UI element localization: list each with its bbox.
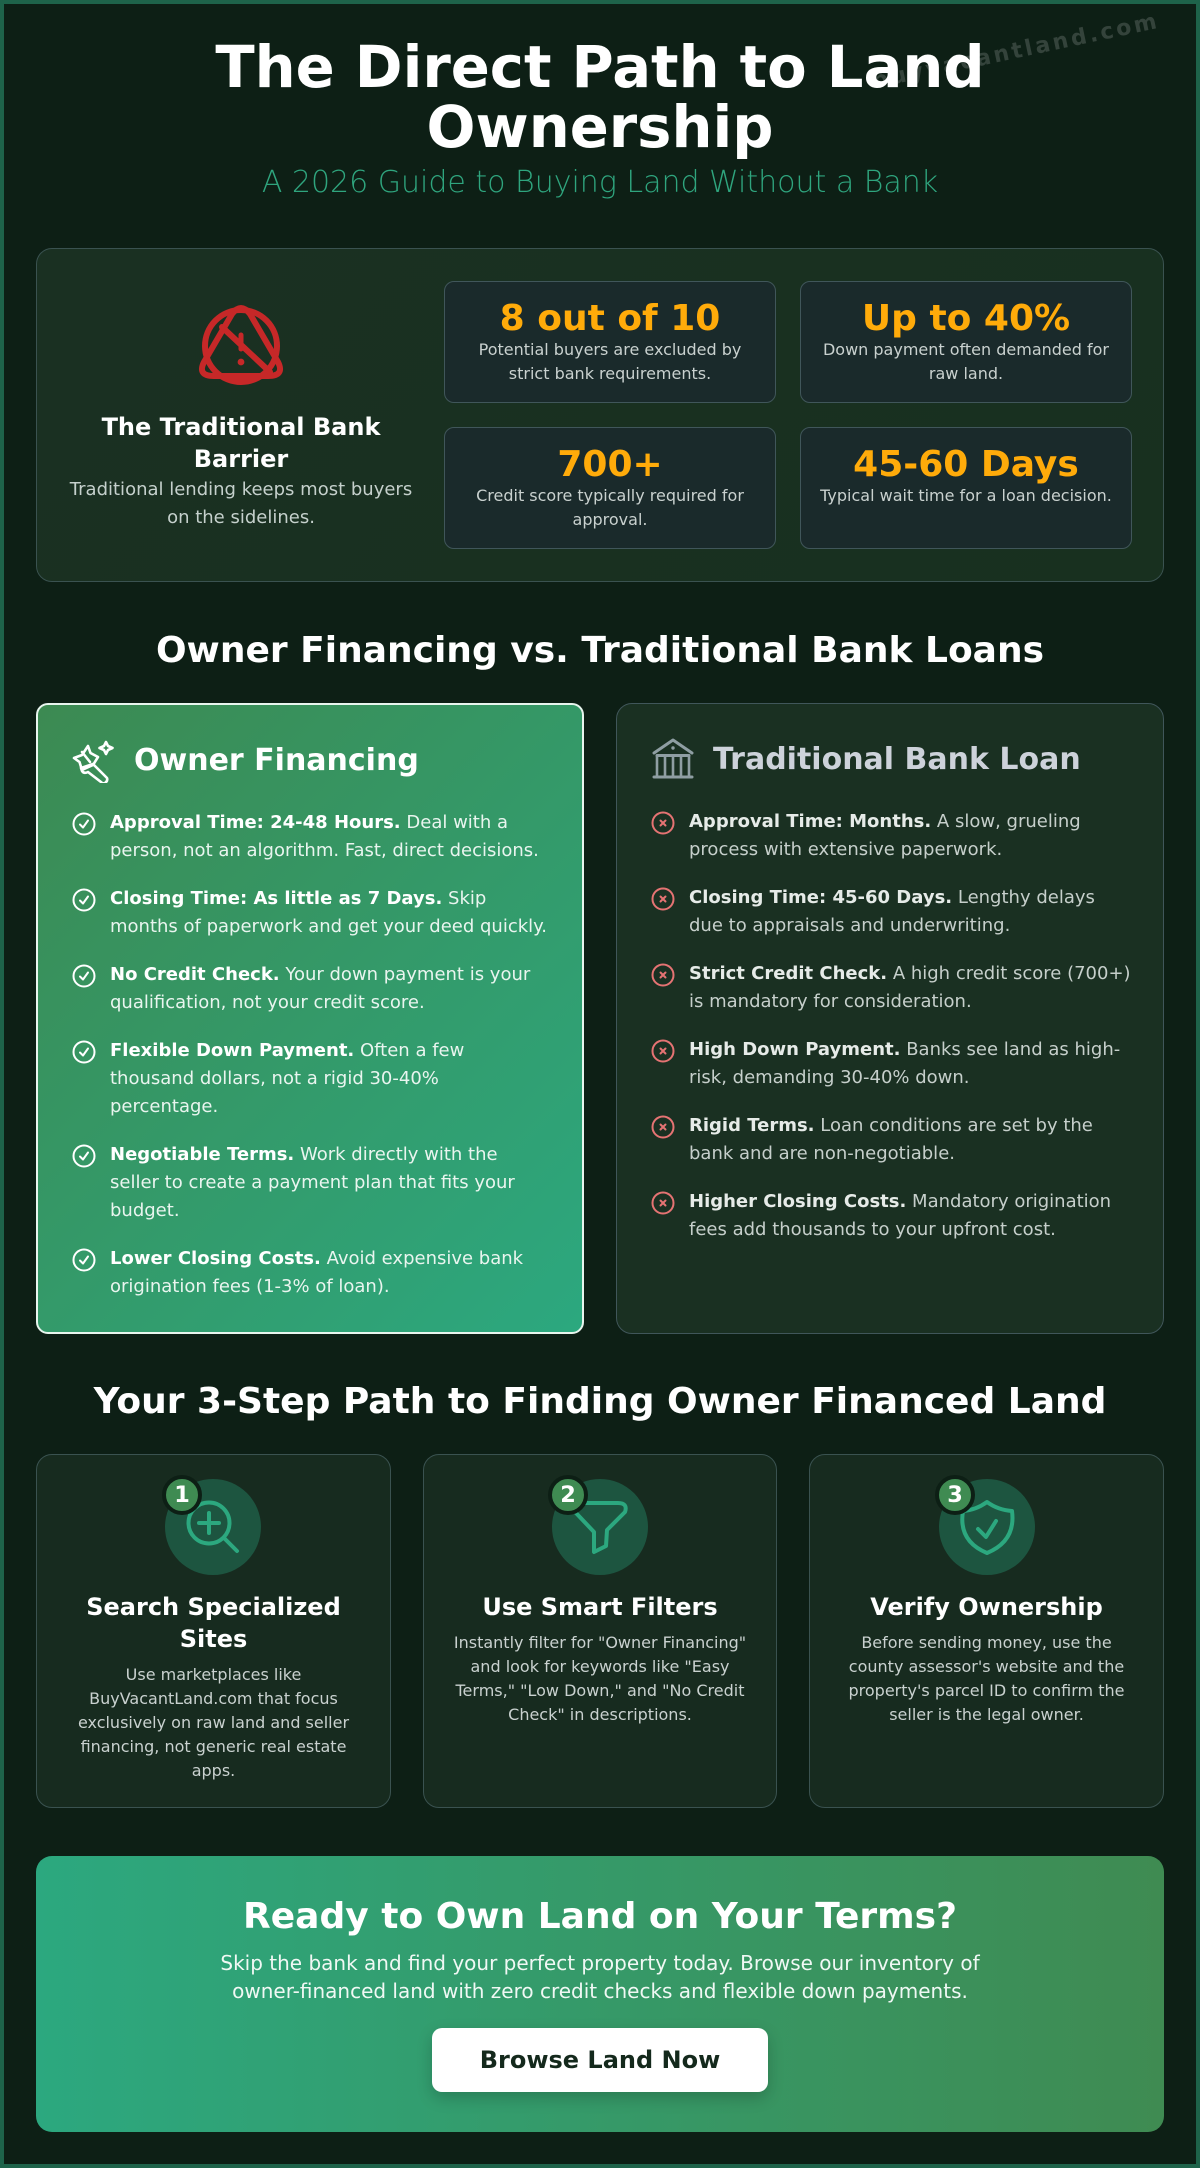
barrier heading: Barrier — [194, 445, 288, 473]
barrier heading: The Traditional Bank — [102, 413, 380, 441]
barrier description: Traditional lending keeps most buyers — [70, 479, 412, 500]
step description — [78, 1665, 350, 1780]
bullet: x — [652, 812, 674, 834]
panel: traditional bank loan — [616, 703, 1164, 1334]
watermark: buyvacantland.com — [870, 9, 1162, 94]
panel: owner financing — [36, 703, 584, 1334]
item: closing time: due to appraisals and underwriting. — [689, 915, 1010, 936]
step description — [848, 1633, 1124, 1724]
item: closing time: Closing Time: As little as 7 Days. Skip — [110, 888, 486, 909]
item: flexible down payment: thousand dollars, not a rigid 30-40% — [110, 1068, 439, 1089]
step description: Before sending money, use the — [861, 1633, 1112, 1652]
stat card: 45-60 days — [800, 427, 1132, 549]
item: no credit check: No Credit Check. Your down payment is your — [110, 964, 530, 985]
item: lower closing costs: origination fees (1-3% of loan). — [110, 1276, 390, 1297]
item: strict credit check: Strict Credit Check. A high credit score (700+) — [689, 963, 1131, 984]
icon: magnifier plus — [186, 1500, 240, 1553]
bullet: x — [652, 1116, 674, 1138]
stat card: up to 40%: Up to 40% — [862, 298, 1070, 339]
step description: BuyVacantLand.com that focus — [89, 1689, 338, 1708]
icon: bank building — [652, 738, 694, 778]
item: closing time — [110, 888, 547, 937]
barrier description: on the sidelines. — [167, 507, 315, 528]
item: high down payment: High Down Payment. Banks see land as high- — [689, 1039, 1120, 1060]
stat card: 45-60 days: 45-60 Days — [853, 444, 1079, 485]
item: approval time: person, not an algorithm. Fast, direct decisions. — [110, 840, 539, 861]
panel: call to action — [36, 1856, 1164, 2132]
item: approval time — [110, 812, 539, 861]
stat card: 700+ — [444, 427, 776, 549]
step number 3 — [935, 1475, 975, 1515]
item: strict credit check: is mandatory for consideration. — [689, 991, 972, 1012]
stat card: 8 out of 10 — [444, 281, 776, 403]
icon circle — [165, 1479, 261, 1575]
stat card: up to 40% — [800, 281, 1132, 403]
subtitle: A 2026 Guide to Buying Land Without a Bank — [262, 165, 938, 200]
barrier heading — [102, 413, 381, 473]
item: flexible down payment: Flexible Down Payment. Often a few — [110, 1040, 464, 1061]
icon circle — [939, 1479, 1035, 1575]
stat card: 700+: 700+ — [557, 444, 663, 485]
step description: Use marketplaces like — [126, 1665, 301, 1684]
item: approval time: Approval Time: 24-48 Hours. Deal with a — [110, 812, 508, 833]
title: Ownership — [427, 94, 773, 161]
step description: financing, not generic real estate — [81, 1737, 346, 1756]
item: negotiable terms: budget. — [110, 1200, 180, 1221]
step description: Terms," "Low Down," and "No Credit — [456, 1681, 744, 1700]
heading: comparison: Owner Financing vs. Traditional Bank Loans — [156, 630, 1044, 671]
bullet: check — [72, 1040, 96, 1064]
barrier description — [70, 479, 412, 528]
step description: Instantly filter for "Owner Financing" — [454, 1633, 746, 1652]
item: flexible down payment: percentage. — [110, 1096, 218, 1117]
drawback list — [652, 811, 1131, 1240]
item: higher closing costs: fees add thousands to your upfront cost. — [689, 1219, 1056, 1240]
step title — [86, 1593, 341, 1653]
cta heading: Ready to Own Land on Your Terms? — [243, 1896, 957, 1937]
bullet: check — [72, 1144, 96, 1168]
step number 3: 3 — [947, 1482, 963, 1508]
bullet: check — [72, 888, 96, 912]
stat card: 45-60 days: Typical wait time for a loan decision. — [820, 486, 1112, 505]
panel: step 2 — [423, 1454, 777, 1808]
item: closing time — [689, 887, 1095, 936]
button — [432, 2028, 768, 2092]
item: lower closing costs — [110, 1248, 523, 1297]
stat card: up to 40%: raw land. — [929, 364, 1003, 383]
item: strict credit check — [689, 963, 1131, 1012]
stat card: up to 40%: Down payment often demanded for — [823, 340, 1109, 359]
step number 2 — [548, 1475, 588, 1515]
cta text: Skip the bank and find your perfect property today. Browse our inventory of — [220, 1951, 980, 1975]
stat card: 700+: approval. — [573, 510, 647, 529]
item: high down payment: risk, demanding 30-40% down. — [689, 1067, 970, 1088]
stat card: 8 out of 10: Potential buyers are excluded by — [479, 340, 741, 359]
bullet: check — [72, 812, 96, 836]
item: high down payment — [689, 1039, 1120, 1088]
step title: Sites — [180, 1625, 247, 1653]
stat card: 8 out of 10: strict bank requirements. — [509, 364, 711, 383]
panel: step 3 — [809, 1454, 1164, 1808]
icon: funnel — [574, 1501, 628, 1554]
icon: shield check — [960, 1500, 1014, 1555]
button: Browse Land Now — [480, 2046, 720, 2074]
item: approval time: Approval Time: Months. A slow, grueling — [689, 811, 1081, 832]
step description: Check" in descriptions. — [508, 1705, 692, 1724]
step description: county assessor's website and the — [849, 1657, 1124, 1676]
item: negotiable terms: Negotiable Terms. Work directly with the — [110, 1144, 498, 1165]
item: approval time — [689, 811, 1081, 860]
stat card: 700+: Credit score typically required for — [476, 486, 744, 505]
icon: magic wand sparkles — [72, 740, 114, 783]
item: negotiable terms — [110, 1144, 515, 1221]
cta text: owner-financed land with zero credit checks and flexible down payments. — [232, 1979, 968, 2003]
step number 1: 1 — [174, 1482, 190, 1508]
benefit list — [72, 812, 547, 1297]
bullet: x — [652, 964, 674, 986]
card heading: Traditional Bank Loan — [713, 742, 1081, 777]
step number 1 — [162, 1475, 202, 1515]
item: higher closing costs — [689, 1191, 1111, 1240]
bullet: x — [652, 888, 674, 910]
icon: warning triangle with ban circle — [198, 305, 284, 385]
panel: traditional bank barrier — [36, 248, 1164, 582]
card heading: Owner Financing — [134, 743, 419, 778]
item: higher closing costs: Higher Closing Costs. Mandatory origination — [689, 1191, 1111, 1212]
item: approval time: process with extensive paperwork. — [689, 839, 1002, 860]
item: flexible down payment — [110, 1040, 464, 1117]
item: no credit check: qualification, not your credit score. — [110, 992, 425, 1013]
step description: apps. — [192, 1761, 235, 1780]
bullet: check — [72, 1248, 96, 1272]
item: closing time: Closing Time: 45-60 Days. Lengthy delays — [689, 887, 1095, 908]
item: rigid terms: bank and are non-negotiable. — [689, 1143, 955, 1164]
stat card: 8 out of 10: 8 out of 10 — [500, 298, 720, 339]
step title: Use Smart Filters — [482, 1593, 718, 1621]
item: no credit check — [110, 964, 530, 1013]
step description: seller is the legal owner. — [889, 1705, 1084, 1724]
item: negotiable terms: seller to create a payment plan that fits your — [110, 1172, 515, 1193]
step number 2: 2 — [560, 1482, 576, 1508]
item: lower closing costs: Lower Closing Costs. Avoid expensive bank — [110, 1248, 523, 1269]
item: rigid terms — [689, 1115, 1093, 1164]
bullet: x — [652, 1192, 674, 1214]
step description: property's parcel ID to confirm the — [848, 1681, 1124, 1700]
item: rigid terms: Rigid Terms. Loan conditions are set by the — [689, 1115, 1093, 1136]
icon circle — [552, 1479, 648, 1575]
step description: exclusively on raw land and seller — [78, 1713, 349, 1732]
panel: step 1 — [36, 1454, 391, 1808]
cta text — [220, 1951, 980, 2003]
step title: Verify Ownership — [870, 1593, 1103, 1621]
bullet: check — [72, 964, 96, 988]
title — [215, 34, 985, 161]
heading: three steps: Your 3-Step Path to Finding Owner Financed Land — [94, 1381, 1106, 1422]
title: The Direct Path to Land — [215, 34, 985, 101]
item: closing time: months of paperwork and get your deed quickly. — [110, 916, 547, 937]
step description — [454, 1633, 746, 1724]
step description: and look for keywords like "Easy — [470, 1657, 730, 1676]
bullet: x — [652, 1040, 674, 1062]
step title: Search Specialized — [86, 1593, 341, 1621]
